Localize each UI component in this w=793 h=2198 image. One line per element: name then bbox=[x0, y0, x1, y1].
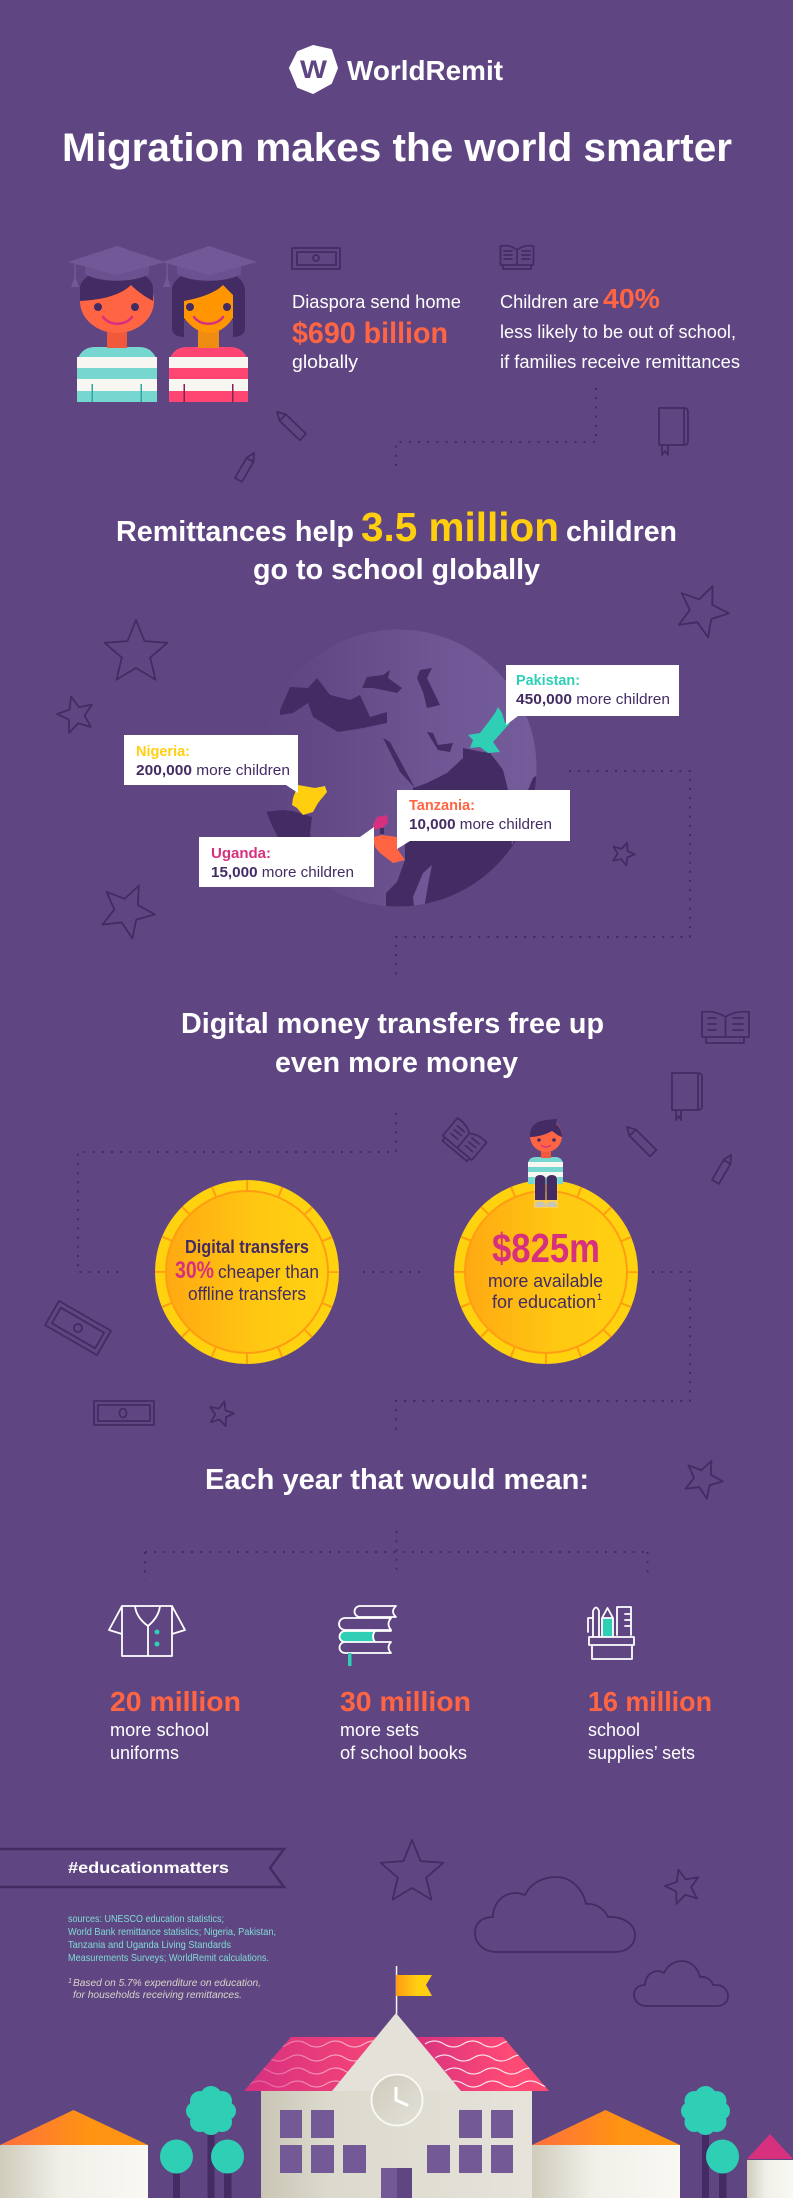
footnote: 1 bbox=[68, 1978, 72, 1985]
heading: remittances: go to school globally bbox=[253, 554, 540, 586]
heading: remittances: 3.5 million bbox=[361, 504, 559, 550]
cloud bbox=[475, 1877, 635, 1952]
icon: pencil bbox=[274, 409, 306, 440]
stat: children: if families receive remittances bbox=[500, 352, 740, 372]
callout: Pakistan: 450,000 more children bbox=[516, 691, 670, 708]
icon: banknote bbox=[94, 1401, 154, 1425]
icon: stack of books bbox=[339, 1606, 396, 1666]
graduate two bbox=[162, 246, 257, 402]
right house bbox=[532, 2110, 680, 2198]
coin: $825m: for education bbox=[492, 1292, 596, 1312]
stat: children: 40% bbox=[603, 283, 660, 314]
trees right bbox=[681, 2086, 739, 2198]
stat: uniforms bbox=[110, 1686, 241, 1763]
title: Migration makes the world smarter bbox=[62, 126, 732, 170]
heading: digital transfers: Digital money transfers free up bbox=[181, 1008, 604, 1040]
callout: Nigeria: Nigeria: bbox=[136, 743, 190, 760]
icon: pencil cup bbox=[588, 1607, 634, 1659]
logo: WorldRemit: W bbox=[300, 56, 327, 84]
icon: pencil bbox=[712, 1153, 734, 1184]
star bbox=[54, 692, 97, 735]
school building bbox=[244, 2013, 549, 2198]
callout: Tanzania: Tanzania: bbox=[409, 797, 475, 814]
school flag bbox=[396, 1966, 432, 2014]
coin: $825m: 1 bbox=[597, 1292, 602, 1302]
stat: diaspora: $690 billion bbox=[292, 317, 448, 350]
stat: uniforms: more school bbox=[110, 1720, 209, 1740]
country: Uganda bbox=[373, 815, 388, 834]
stat: diaspora: Diaspora send home bbox=[292, 292, 461, 312]
callout: Uganda bbox=[199, 827, 374, 887]
footnote: Based on 5.7% expenditure on education, bbox=[73, 1977, 261, 1989]
stat: books: more sets bbox=[340, 1720, 419, 1740]
sources: Measurements Surveys; WorldRemit calculations. bbox=[68, 1952, 269, 1964]
footnote: for households receiving remittances. bbox=[73, 1989, 242, 2001]
stat: uniforms: 20 million bbox=[110, 1686, 241, 1717]
stat: children: Children are bbox=[500, 292, 599, 312]
callout: Uganda: Uganda: bbox=[211, 845, 271, 862]
left house bbox=[0, 2110, 148, 2198]
windows bbox=[280, 2110, 513, 2173]
star bbox=[381, 1840, 443, 1900]
heading: remittances bbox=[116, 504, 677, 586]
callout: Tanzania bbox=[397, 790, 570, 849]
stat: children bbox=[500, 283, 740, 372]
callout: Nigeria: 200,000 more children bbox=[136, 762, 290, 779]
clock bbox=[372, 2074, 422, 2126]
small pink house bbox=[747, 2134, 793, 2198]
sources: World Bank remittance statistics; Nigeria, Pakistan, bbox=[68, 1926, 276, 1938]
icon: notebook bbox=[672, 1073, 702, 1120]
stat: diaspora bbox=[292, 292, 461, 372]
icon: pencil bbox=[624, 1124, 656, 1156]
globe map bbox=[266, 630, 536, 906]
sources: Tanzania and Uganda Living Standards bbox=[68, 1939, 231, 1951]
illustration: two graduates bbox=[68, 246, 257, 402]
coin: $825m bbox=[454, 1180, 638, 1364]
country: Pakistan bbox=[468, 707, 510, 753]
star bbox=[93, 874, 163, 943]
walls bbox=[261, 2091, 532, 2198]
stat: books bbox=[340, 1686, 471, 1763]
icon: open book bbox=[702, 1012, 749, 1043]
stat: uniforms: uniforms bbox=[110, 1743, 179, 1763]
icon: banknote bbox=[292, 248, 340, 269]
stat: books: 30 million bbox=[340, 1686, 471, 1717]
roof bbox=[244, 2037, 549, 2091]
heading: each year: Each year that would mean: bbox=[205, 1464, 589, 1496]
icon: pencil bbox=[235, 451, 257, 482]
cloud bbox=[634, 1961, 728, 2006]
star bbox=[662, 1865, 703, 1906]
coin: digital transfers bbox=[155, 1180, 339, 1364]
star bbox=[609, 839, 638, 867]
door bbox=[381, 2168, 412, 2198]
stat: supplies bbox=[588, 1686, 712, 1763]
gable bbox=[332, 2013, 461, 2091]
hashtag banner bbox=[0, 1849, 284, 1887]
logo: WorldRemit: WorldRemit bbox=[347, 55, 503, 86]
coin: digital transfers: Digital transfers bbox=[185, 1236, 309, 1257]
stat: supplies: 16 million bbox=[588, 1686, 712, 1717]
callout: Tanzania: 10,000 more children bbox=[409, 816, 552, 833]
footnote bbox=[68, 1977, 261, 2001]
star bbox=[670, 576, 736, 641]
stat: children: less likely to be out of school, bbox=[500, 322, 736, 342]
logo: WorldRemit bbox=[290, 46, 503, 93]
callout: Uganda: 15,000 more children bbox=[211, 864, 354, 881]
heading: remittances: Remittances help bbox=[116, 516, 354, 548]
star bbox=[105, 620, 167, 680]
boy sitting on coin bbox=[528, 1119, 563, 1208]
callout: Pakistan bbox=[506, 665, 679, 725]
callout: Pakistan: Pakistan: bbox=[516, 672, 580, 689]
coin: $825m: more available bbox=[488, 1271, 603, 1291]
coin: $825m: $825m bbox=[492, 1225, 600, 1271]
icon: tilted banknote bbox=[45, 1301, 111, 1355]
heading: remittances: children bbox=[566, 516, 677, 548]
stat: diaspora: globally bbox=[292, 352, 358, 372]
icon: open book bbox=[500, 246, 534, 269]
coin: digital transfers: 30% bbox=[175, 1257, 214, 1284]
stat: supplies: supplies’ sets bbox=[588, 1743, 695, 1763]
trees left bbox=[160, 2086, 244, 2198]
stat: books: of school books bbox=[340, 1743, 467, 1763]
icon: uniform shirt bbox=[109, 1606, 185, 1656]
sources bbox=[68, 1913, 276, 1964]
heading: digital transfers: even more money bbox=[275, 1047, 518, 1079]
coin: digital transfers: offline transfers bbox=[188, 1284, 306, 1304]
coin: digital transfers: cheaper than bbox=[218, 1262, 319, 1282]
graduate one bbox=[68, 246, 165, 402]
hashtag banner: #educationmatters bbox=[68, 1860, 229, 1877]
star bbox=[679, 1453, 729, 1502]
icon: tilted book bbox=[440, 1118, 487, 1163]
heading: digital transfers bbox=[181, 1008, 604, 1079]
icon: notebook bbox=[659, 408, 688, 455]
sources: sources: UNESCO education statistics; bbox=[68, 1913, 224, 1925]
star bbox=[206, 1398, 236, 1427]
stat: supplies: school bbox=[588, 1720, 640, 1740]
country: Nigeria bbox=[292, 785, 327, 815]
callout: Nigeria bbox=[124, 735, 298, 793]
country: Tanzania bbox=[373, 835, 405, 863]
